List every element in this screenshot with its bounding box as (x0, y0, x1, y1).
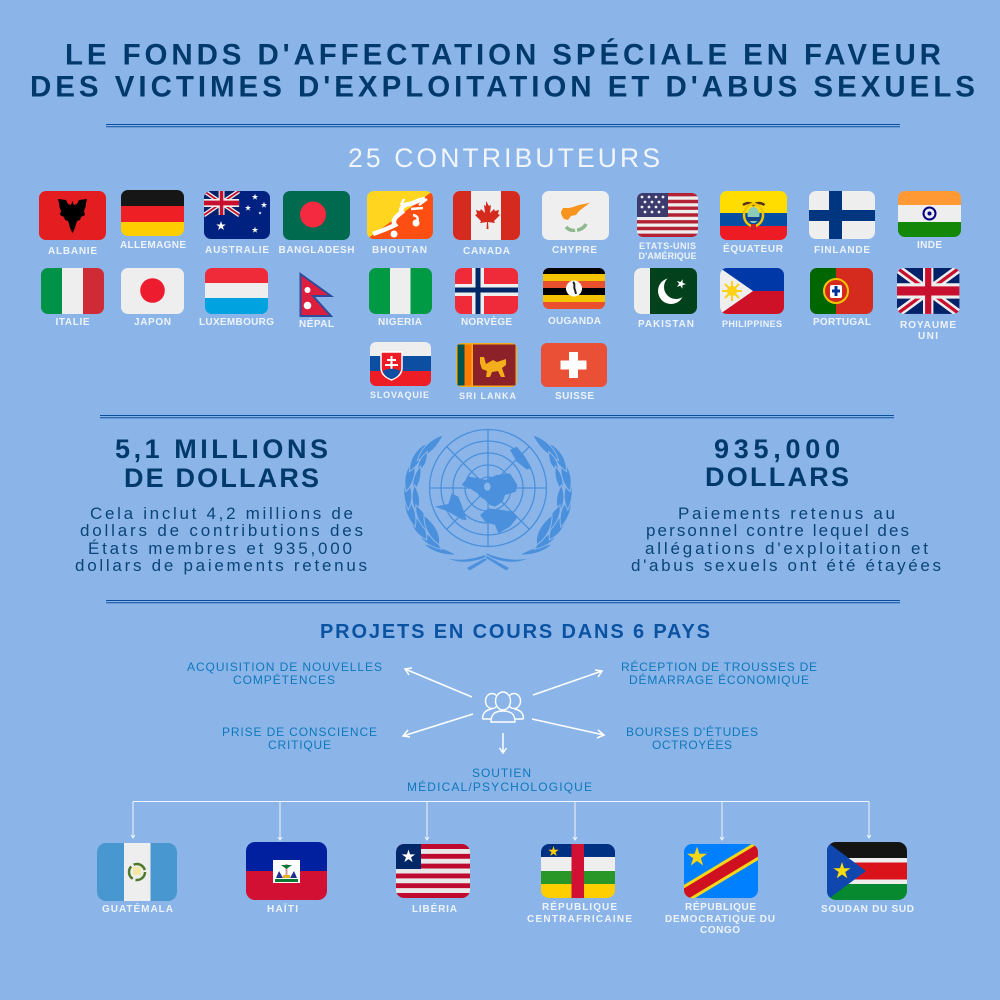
panel: withheld payments: d'abus sexuels ont été étayées (631, 556, 941, 575)
country: Libéria: LIBÉRIA (412, 902, 457, 915)
country: Luxembourg (199, 268, 274, 328)
country: Ouganda (543, 268, 605, 327)
country: Finlande: FINLANDE (814, 245, 870, 256)
country: Norvège: NORVÈGE (461, 315, 512, 328)
panel: total contributions: DE DOLLARS (124, 463, 319, 493)
panel: withheld payments: Paiements retenus au (678, 504, 895, 523)
text: prise de conscience: PRISE DE CONSCIENCE (222, 725, 377, 739)
text: soutien (407, 766, 592, 794)
country: Japon: JAPON (134, 317, 171, 328)
country: Sri Lanka: SRI LANKA (459, 391, 516, 401)
text: acquisition: ACQUISITION DE NOUVELLES (187, 660, 382, 674)
country: Équateur (720, 191, 787, 255)
country: Libéria (396, 844, 471, 915)
text: réception: DÉMARRAGE ÉCONOMIQUE (629, 672, 809, 687)
icon: UN emblem (404, 429, 572, 571)
country: Finlande (809, 191, 875, 256)
heading: projets: PROJETS EN COURS DANS 6 PAYS (320, 621, 710, 643)
country: Italie (41, 268, 104, 328)
country: Nigeria (369, 268, 432, 328)
country: Philippines (720, 268, 784, 329)
country: Albanie: ALBANIE (48, 246, 97, 257)
country: République centrafricaine: RÉPUBLIQUE (542, 900, 617, 913)
country: Népal: NÉPAL (299, 317, 334, 330)
title: DES VICTIMES D'EXPLOITATION ET D'ABUS SEXUELS (30, 71, 975, 104)
heading: 25 contributeurs: 25 CONTRIBUTEURS (348, 143, 660, 173)
country: Australie: AUSTRALIE (205, 245, 269, 256)
country: Etats-Unis d'Amérique: D'AMÉRIQUE (638, 251, 696, 261)
country: Canada: CANADA (463, 246, 510, 257)
country: République centrafricaine (527, 844, 632, 925)
text: soutien: MÉDICAL/PSYCHOLOGIQUE (407, 779, 592, 794)
country: Sri Lanka (456, 343, 517, 401)
country: Allemagne: ALLEMAGNE (120, 240, 186, 251)
panel: withheld payments: allégations d'exploitation et (645, 539, 928, 558)
panel: total contributions: 5,1 MILLIONS (115, 434, 328, 464)
country: République démocratique du Congo: DEMOCRATIQUE DU (665, 914, 775, 925)
country: Royaume Uni: UNI (918, 331, 938, 342)
text: acquisition: COMPÉTENCES (233, 672, 335, 687)
country: Allemagne (120, 190, 186, 251)
text: bourses: OCTROYÉES (652, 737, 732, 752)
panel: project countries (97, 842, 914, 936)
country: Nigeria: NIGERIA (378, 317, 422, 328)
country: Suisse: SUISSE (555, 391, 594, 402)
country: Ouganda: OUGANDA (548, 316, 601, 327)
text: réception (621, 659, 817, 687)
country: Suisse (541, 343, 607, 402)
country: Bhoutan (367, 191, 433, 256)
country: Japon (121, 268, 184, 328)
panel: withheld payments (631, 434, 941, 575)
country: Royaume Uni (897, 268, 959, 342)
country: Guatémala: GUATÉMALA (102, 902, 173, 915)
text: réception: RÉCEPTION DE TROUSSES DE (621, 659, 817, 674)
country: Inde: INDE (917, 240, 942, 251)
panel: contributor flags (39, 190, 961, 402)
country: Népal (299, 274, 334, 330)
country: Slovaquie (370, 342, 431, 400)
panel: total contributions (75, 434, 367, 575)
panel: total contributions: dollars de contributions des (80, 521, 363, 540)
country: Soudan du Sud (821, 842, 914, 915)
text: soutien: SOUTIEN (472, 766, 531, 780)
country: Guatémala (97, 843, 177, 915)
panel: total contributions: dollars de paiements retenus (75, 556, 367, 575)
country: Canada (453, 191, 520, 257)
country: Chypre: CHYPRE (552, 245, 597, 256)
country: Pakistan (634, 268, 697, 330)
text: acquisition (187, 660, 382, 687)
country: Luxembourg: LUXEMBOURG (199, 317, 274, 328)
panel: withheld payments: DOLLARS (705, 462, 849, 492)
icon: people (482, 692, 524, 722)
country: Chypre (542, 191, 609, 256)
country: Royaume Uni: ROYAUME (900, 320, 956, 331)
country: Bhoutan: BHOUTAN (372, 245, 427, 256)
country: République démocratique du Congo: RÉPUBLIQUE (685, 900, 756, 913)
text: bourses: BOURSES D'ÉTUDES (626, 724, 758, 739)
country: République démocratique du Congo: CONGO (700, 925, 740, 936)
country: République centrafricaine: CENTRAFRICAINE (527, 914, 632, 925)
country: Philippines: PHILIPPINES (722, 319, 782, 329)
panel: withheld payments: 935,000 (714, 434, 840, 464)
panel: total contributions: Cela inclut 4,2 millions de (90, 504, 353, 523)
country: Etats-Unis d'Amérique: ETATS-UNIS (639, 241, 696, 251)
country: Soudan du Sud: SOUDAN DU SUD (821, 904, 914, 915)
arrows from people icon (403, 668, 604, 753)
panel: withheld payments: personnel contre lequel des (646, 521, 909, 540)
country: Slovaquie: SLOVAQUIE (370, 390, 429, 400)
text: prise de conscience (222, 725, 377, 752)
country: Pakistan: PAKISTAN (638, 319, 694, 330)
country: Italie: ITALIE (56, 317, 90, 328)
text: bourses (626, 724, 758, 752)
connector lines to project countries (131, 802, 871, 840)
title: LE FONDS D'AFFECTATION SPÉCIALE EN FAVEUR (65, 38, 941, 72)
country: Inde (898, 191, 961, 251)
title (30, 38, 975, 104)
country: Haïti: HAÏTI (267, 902, 298, 915)
country: Haïti (246, 842, 327, 915)
country: Portugal (810, 268, 873, 328)
laurel wreath left (404, 435, 491, 571)
country: Etats-Unis d'Amérique (637, 193, 698, 261)
country: Norvège (455, 268, 518, 328)
country: Albanie (39, 191, 106, 257)
country: Bangladesh: BANGLADESH (278, 245, 354, 256)
country: République démocratique du Congo (665, 844, 775, 936)
text: prise de conscience: CRITIQUE (268, 738, 331, 752)
panel: total contributions: États membres et 935,000 (88, 539, 352, 558)
country: Australie (204, 191, 270, 256)
country: Équateur: ÉQUATEUR (723, 242, 784, 255)
country: Bangladesh (278, 191, 354, 256)
country: Portugal: PORTUGAL (813, 317, 871, 328)
